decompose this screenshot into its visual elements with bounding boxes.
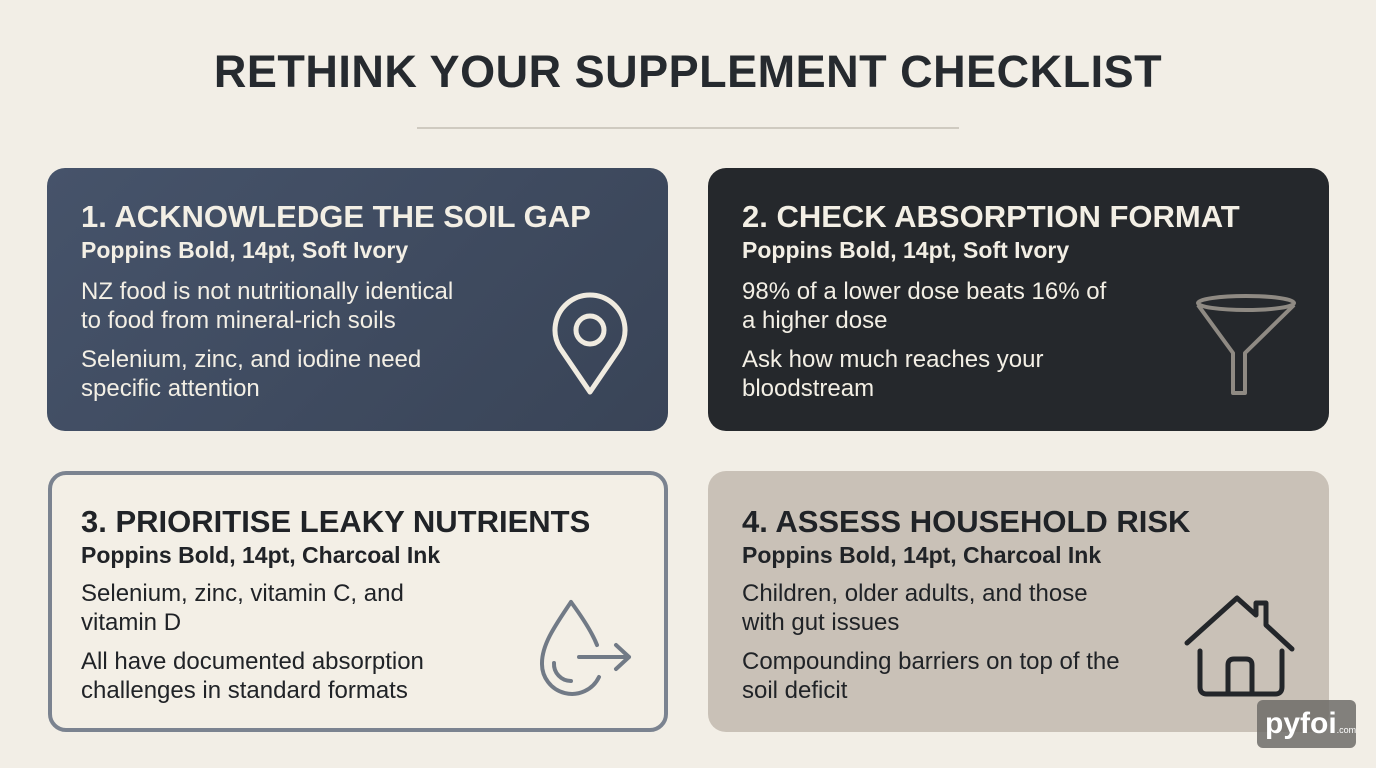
- panel: 2 absorption: [708, 168, 1329, 431]
- logo: pyfoi: pyfoi.com: [1265, 707, 1356, 740]
- icon: house: [1184, 595, 1294, 696]
- panel: 4 household risk: [708, 471, 1329, 732]
- text 3: Selenium, zinc, vitamin C, and vitamin D: [81, 580, 404, 636]
- subtitle 3: Poppins Bold, 14pt, Charcoal Ink: [81, 542, 440, 568]
- subtitle 4: Poppins Bold, 14pt, Charcoal Ink: [742, 542, 1101, 568]
- icon: funnel: [1196, 294, 1296, 395]
- subtitle 2: Poppins Bold, 14pt, Soft Ivory: [742, 237, 1069, 263]
- subtitle 1: Poppins Bold, 14pt, Soft Ivory: [81, 237, 408, 263]
- panel: 1 soil gap: [47, 168, 668, 431]
- heading 4: 4. ASSESS HOUSEHOLD RISK: [742, 504, 1190, 539]
- heading 2: 2. CHECK ABSORPTION FORMAT: [742, 199, 1240, 234]
- text 1: NZ food is not nutritionally identical to food from mineral-rich soils: [81, 278, 453, 334]
- heading 3: 3. PRIORITISE LEAKY NUTRIENTS: [81, 504, 590, 539]
- text 1b: Selenium, zinc, and iodine need specific attention: [81, 346, 421, 402]
- icon: location pin: [552, 292, 628, 394]
- text 3b: All have documented absorption challenges in standard formats: [81, 648, 424, 704]
- logo: pyfoi: [1257, 700, 1356, 748]
- text 4b: Compounding barriers on top of the soil deficit: [742, 648, 1120, 704]
- text 2b: Ask how much reaches your bloodstream: [742, 346, 1043, 402]
- text 4: Children, older adults, and those with gut issues: [742, 580, 1088, 636]
- title: RETHINK YOUR SUPPLEMENT CHECKLIST: [214, 46, 1162, 97]
- text 2: 98% of a lower dose beats 16% of a higher dose: [742, 278, 1106, 334]
- heading 1: 1. ACKNOWLEDGE THE SOIL GAP: [81, 199, 591, 234]
- panel: 3 leaky nutrients: [48, 471, 668, 732]
- icon: drop with arrow: [540, 600, 632, 696]
